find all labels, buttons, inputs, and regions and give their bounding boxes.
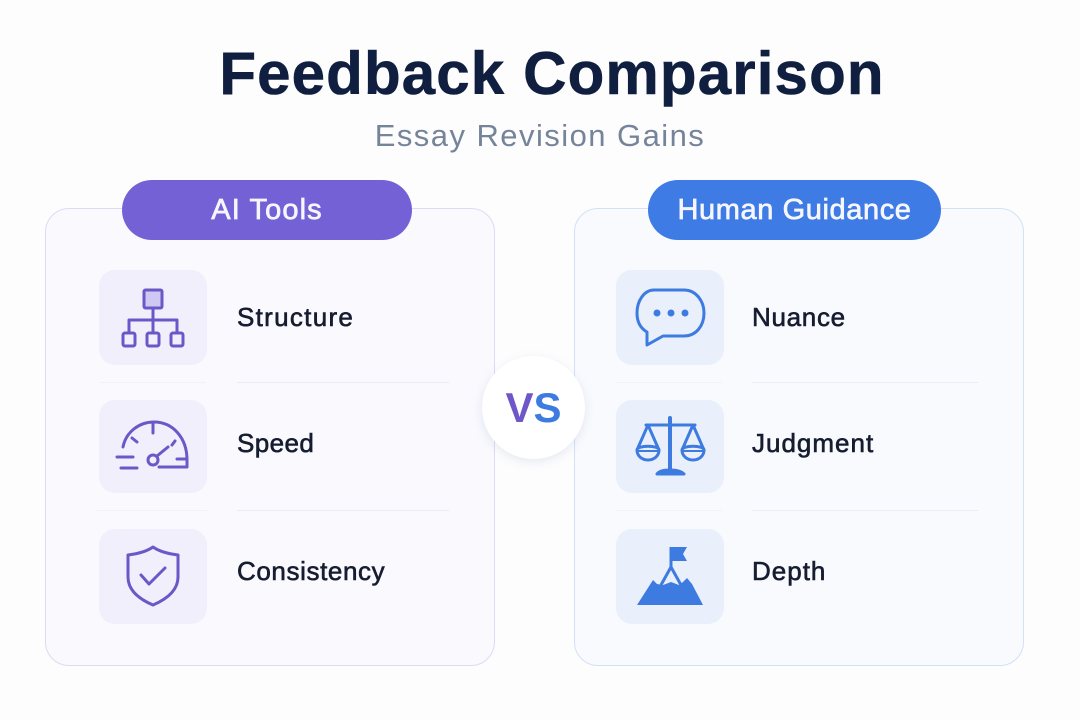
label: speed: Speed [237,428,314,458]
panel card: human guidance [574,208,1024,666]
vs text: VS [505,384,562,431]
icon: speedometer [116,420,188,470]
tile: speed [99,400,207,493]
tile: judgment [616,400,724,493]
tile: structure [99,270,207,365]
icon: scales [635,416,706,476]
panel card: AI tools [45,208,495,666]
human guidance pill heading [648,180,941,240]
divider [616,382,722,383]
title: Feedback Comparison [219,40,885,107]
label: structure: Structure [237,302,354,332]
tile: nuance [616,270,724,365]
divider [616,510,722,511]
vs badge [482,356,585,459]
divider [97,510,207,511]
tile: consistency [99,529,207,624]
AI tools pill heading: AI Tools [211,194,323,226]
tile: depth [616,529,724,624]
label: judgment: Judgment [752,428,874,458]
subtitle: Essay Revision Gains [375,118,705,153]
AI tools pill heading [122,180,412,240]
label: depth: Depth [752,556,826,586]
label: nuance: Nuance [752,302,846,332]
icon: shield check [126,546,180,606]
icon: speech bubble [636,288,706,347]
icon: hierarchy [122,288,184,348]
divider [100,382,206,383]
icon: mountain flag [637,547,703,605]
label: consistency: Consistency [237,556,385,586]
human guidance pill heading: Human Guidance [677,194,912,226]
